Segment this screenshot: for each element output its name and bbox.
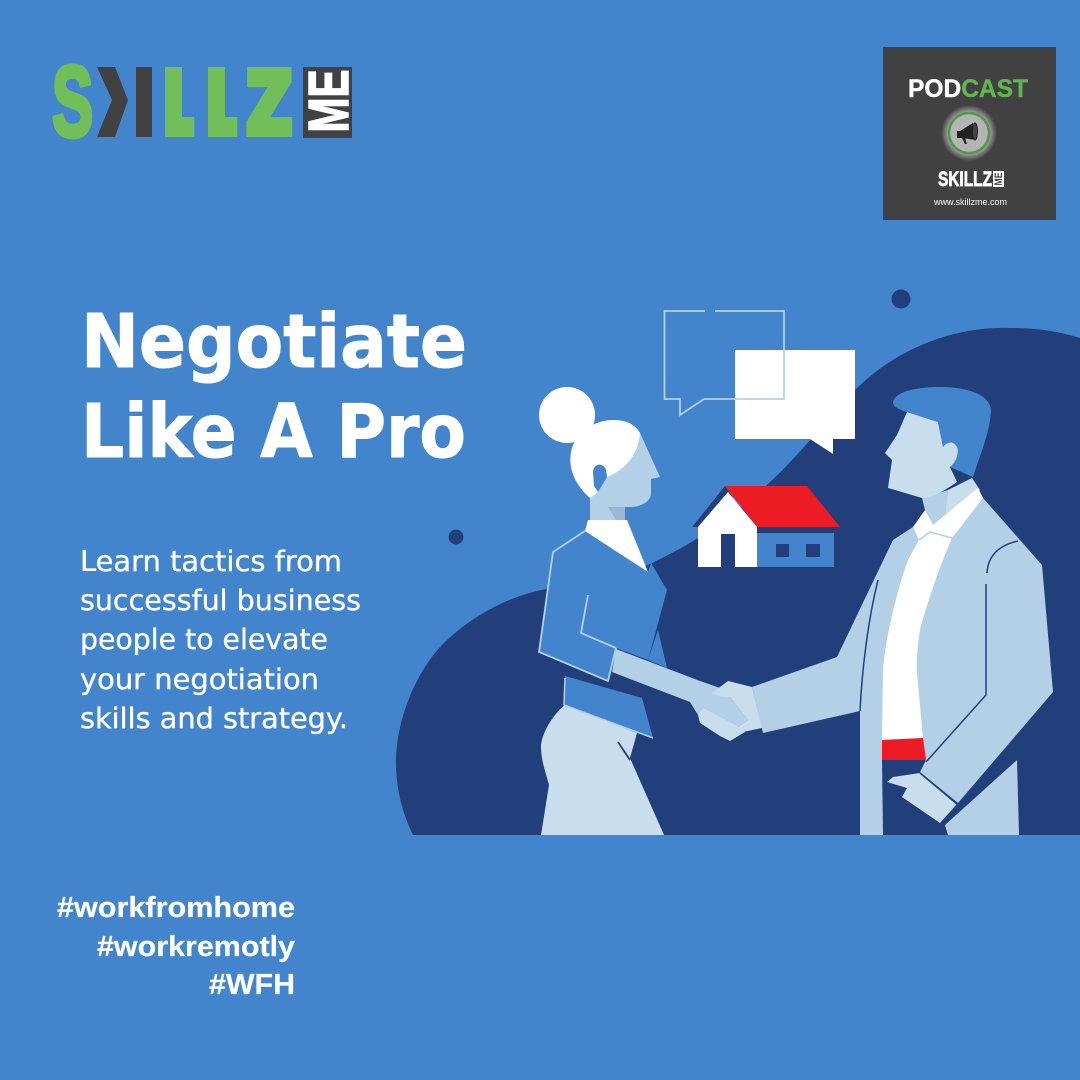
background blob	[396, 328, 1080, 835]
podcast badge	[883, 47, 1056, 220]
logo: SKILLZ ME: ME	[297, 70, 361, 132]
man figure	[712, 387, 1053, 835]
hashtags: #WFH	[209, 969, 295, 1001]
jacket seams	[860, 541, 1018, 804]
hand on wrist	[887, 773, 957, 823]
title: Negotiate	[81, 299, 467, 385]
blouse	[539, 531, 667, 681]
body text: people to elevate	[80, 623, 328, 656]
collar	[585, 520, 648, 572]
blouse lower piece	[648, 630, 667, 668]
skirt	[541, 705, 664, 835]
icon: megaphone	[941, 105, 997, 161]
hashtags	[57, 892, 295, 1001]
face and ear	[885, 412, 958, 498]
logo: SKILLZ ME: L	[163, 55, 193, 154]
podcast heading: PODCAST	[908, 75, 1028, 103]
decorative dots	[448, 290, 910, 544]
neck	[922, 490, 948, 527]
jacket	[752, 498, 1053, 835]
hair	[893, 387, 991, 477]
body text: your negotiation	[80, 663, 319, 696]
mini logo: ME	[993, 172, 1005, 186]
speech bubble: outline	[664, 311, 784, 415]
neck and face	[590, 433, 660, 522]
tie	[882, 738, 926, 760]
body text	[80, 545, 361, 735]
logo: SKILLZ ME	[52, 46, 361, 158]
shirt and collar	[882, 488, 983, 740]
title	[81, 299, 467, 475]
logo: SKILLZ ME: L	[206, 55, 236, 154]
body text: Learn tactics from	[80, 545, 342, 578]
hashtags: #workremotly	[97, 931, 295, 963]
arm and palm	[612, 649, 748, 728]
title: Like A Pro	[81, 389, 466, 475]
logo: SKILLZ ME: S	[52, 46, 93, 158]
hashtags: #workfromhome	[57, 892, 295, 924]
lower jacket	[945, 760, 1019, 835]
man hand	[712, 681, 762, 732]
speech bubble: white	[735, 350, 855, 454]
body text: skills and strategy.	[80, 702, 348, 735]
waist band	[564, 676, 653, 738]
woman hand fingers	[698, 708, 745, 741]
logo: SKILLZ ME: Z	[246, 55, 292, 153]
hair and bun	[539, 387, 640, 498]
website url: www.skillzme.com	[933, 197, 1007, 208]
icon: house	[692, 486, 840, 567]
woman figure	[539, 387, 748, 835]
mini logo: SKILLZ	[938, 168, 992, 191]
body text: successful business	[80, 584, 361, 617]
